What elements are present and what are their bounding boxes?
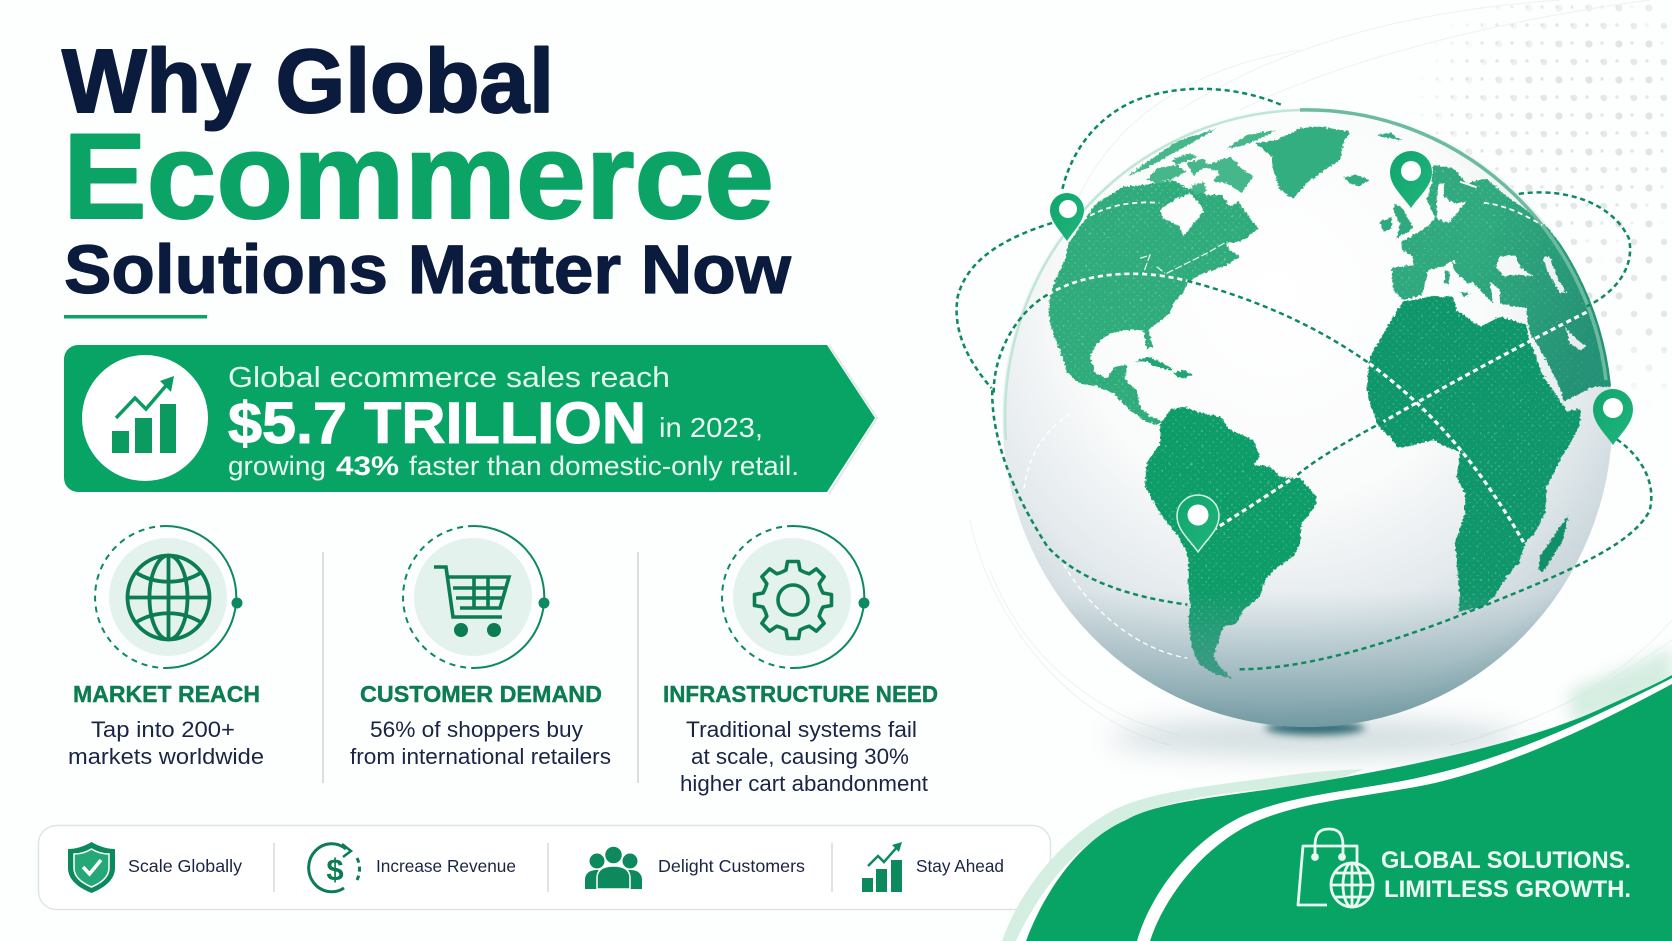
arrow banner — [64, 345, 877, 494]
route: north america arc inner — [994, 294, 1048, 393]
arctic islands — [1128, 128, 1277, 195]
globe sphere — [1002, 107, 1612, 727]
title line: solutions matter now: Solutions Matter Now — [64, 231, 791, 308]
route: atlantic green segment — [1297, 422, 1383, 475]
americas and arctic — [1048, 127, 1402, 425]
white stripe — [1137, 678, 1672, 941]
route: africa white segment — [1369, 364, 1524, 542]
great lakes and st lawrence — [1140, 242, 1227, 273]
background halftone dots — [1423, 4, 1667, 372]
panel: infrastructure need — [663, 526, 938, 796]
route: atlantic north green segment — [1187, 281, 1369, 364]
icon: globe in ring — [95, 526, 242, 668]
madagascar — [1538, 515, 1568, 572]
eurasia and british isles — [1380, 163, 1617, 402]
label: delight customers: Delight Customers — [658, 856, 805, 876]
dashed orbit routes — [957, 89, 1651, 669]
route: russia white segment — [1484, 203, 1542, 225]
africa and madagascar — [1367, 297, 1581, 612]
text: customer demand description: from international retailers — [350, 744, 611, 769]
footer tagline — [1381, 847, 1631, 903]
icon: customers group — [585, 846, 642, 889]
text: infrastructure need description: at scale, causing 30% — [691, 744, 909, 769]
svalbard — [1377, 133, 1402, 141]
heading: customer demand: CUSTOMER DEMAND — [360, 681, 602, 707]
text: customer demand description — [350, 717, 611, 769]
africa — [1367, 297, 1581, 612]
label: increase revenue: Increase Revenue — [376, 856, 516, 876]
icon: shopping bag with globe — [1298, 829, 1373, 907]
orbit: west loop — [957, 223, 1052, 388]
banner chart icon — [82, 355, 208, 481]
arrow banner: faster than domestic-only retail. — [409, 451, 799, 481]
green wave — [1026, 675, 1672, 941]
text: customer demand description: 56% of shoppers buy — [370, 717, 583, 742]
north coast highlights — [1460, 180, 1477, 188]
text: infrastructure need description: Traditional systems fail — [686, 717, 917, 742]
pin: north america — [1050, 193, 1084, 241]
globe bottom shading — [1002, 107, 1612, 727]
text: infrastructure need description: higher cart abandonment — [680, 771, 928, 796]
italy and mediterranean islands — [1445, 262, 1477, 297]
footer tagline: LIMITLESS GROWTH. — [1384, 876, 1631, 903]
background faint swirl lines — [970, 0, 1672, 745]
banner text: Global ecommerce sales reach — [228, 362, 670, 394]
icon: shield — [68, 842, 115, 893]
panel: customer demand — [350, 526, 611, 769]
title underline — [64, 315, 207, 318]
globe — [1002, 107, 1617, 727]
eurasia — [1392, 165, 1617, 402]
banner arrow shape — [829, 345, 877, 494]
south america — [1145, 407, 1317, 678]
route: brazil white segment — [1215, 475, 1297, 529]
text: market reach description: Tap into 200+ — [91, 717, 235, 742]
route: atlantic to arabia white segment — [1383, 312, 1587, 422]
arrow banner: $5.7 TRILLION — [228, 391, 646, 456]
bar outline — [38, 826, 1050, 910]
icon: cart in ring — [403, 526, 550, 668]
cuba — [1135, 357, 1173, 370]
title — [62, 32, 791, 308]
hispaniola — [1173, 370, 1193, 378]
icon: stay ahead chart — [862, 842, 902, 892]
pin: east africa — [1593, 389, 1633, 445]
pale outer band — [1002, 769, 1365, 941]
pin: europe — [1390, 151, 1432, 208]
pin: south america — [1177, 495, 1219, 552]
iceland — [1343, 175, 1370, 186]
text: market reach description: markets worldwide — [68, 744, 264, 769]
label: stay ahead: Stay Ahead — [916, 856, 1004, 876]
column dividers — [323, 552, 638, 783]
orbit: south west sweep — [992, 390, 1187, 605]
globe shadow — [1110, 720, 1520, 756]
title line: ecommerce: Ecommerce — [63, 108, 774, 244]
text: market reach description — [68, 717, 264, 769]
orbit: east loop — [1519, 192, 1630, 306]
white gap behind wave — [1016, 820, 1130, 941]
panel: market reach — [68, 526, 264, 769]
footer wave — [1002, 648, 1672, 941]
arrow banner: 43% — [336, 451, 399, 481]
heading: market reach: MARKET REACH — [73, 681, 260, 707]
globe rim highlight — [1005, 110, 1606, 440]
arrow banner: growing — [228, 451, 326, 481]
eurasia east shading — [1500, 208, 1611, 402]
arrow banner: in 2023, — [659, 412, 763, 443]
greenland — [1255, 127, 1350, 198]
bar dividers — [274, 843, 832, 892]
orbit: south east sweep — [1239, 439, 1651, 669]
benefits bar — [38, 826, 1050, 910]
title line: why global: Why Global — [62, 32, 554, 132]
text: infrastructure need description — [680, 717, 928, 796]
footer tagline: GLOBAL SOLUTIONS. — [1381, 847, 1631, 874]
label: scale globally: Scale Globally — [128, 856, 242, 876]
icon: gear in ring — [722, 526, 870, 668]
britain — [1393, 203, 1413, 238]
route: north america white segment — [1048, 274, 1187, 294]
orbit: upper left arc — [1062, 89, 1281, 189]
icon: revenue dollar — [309, 844, 360, 892]
north america — [1048, 180, 1258, 425]
route: canada white segment — [1075, 202, 1159, 225]
icon: revenue dollar: $ — [326, 852, 344, 887]
orbit: faint white arcs — [1024, 413, 1187, 658]
continents — [1048, 127, 1617, 678]
ireland — [1380, 217, 1392, 232]
heading: infrastructure need: INFRASTRUCTURE NEED — [663, 681, 938, 707]
pale glow above wave — [1570, 648, 1672, 722]
